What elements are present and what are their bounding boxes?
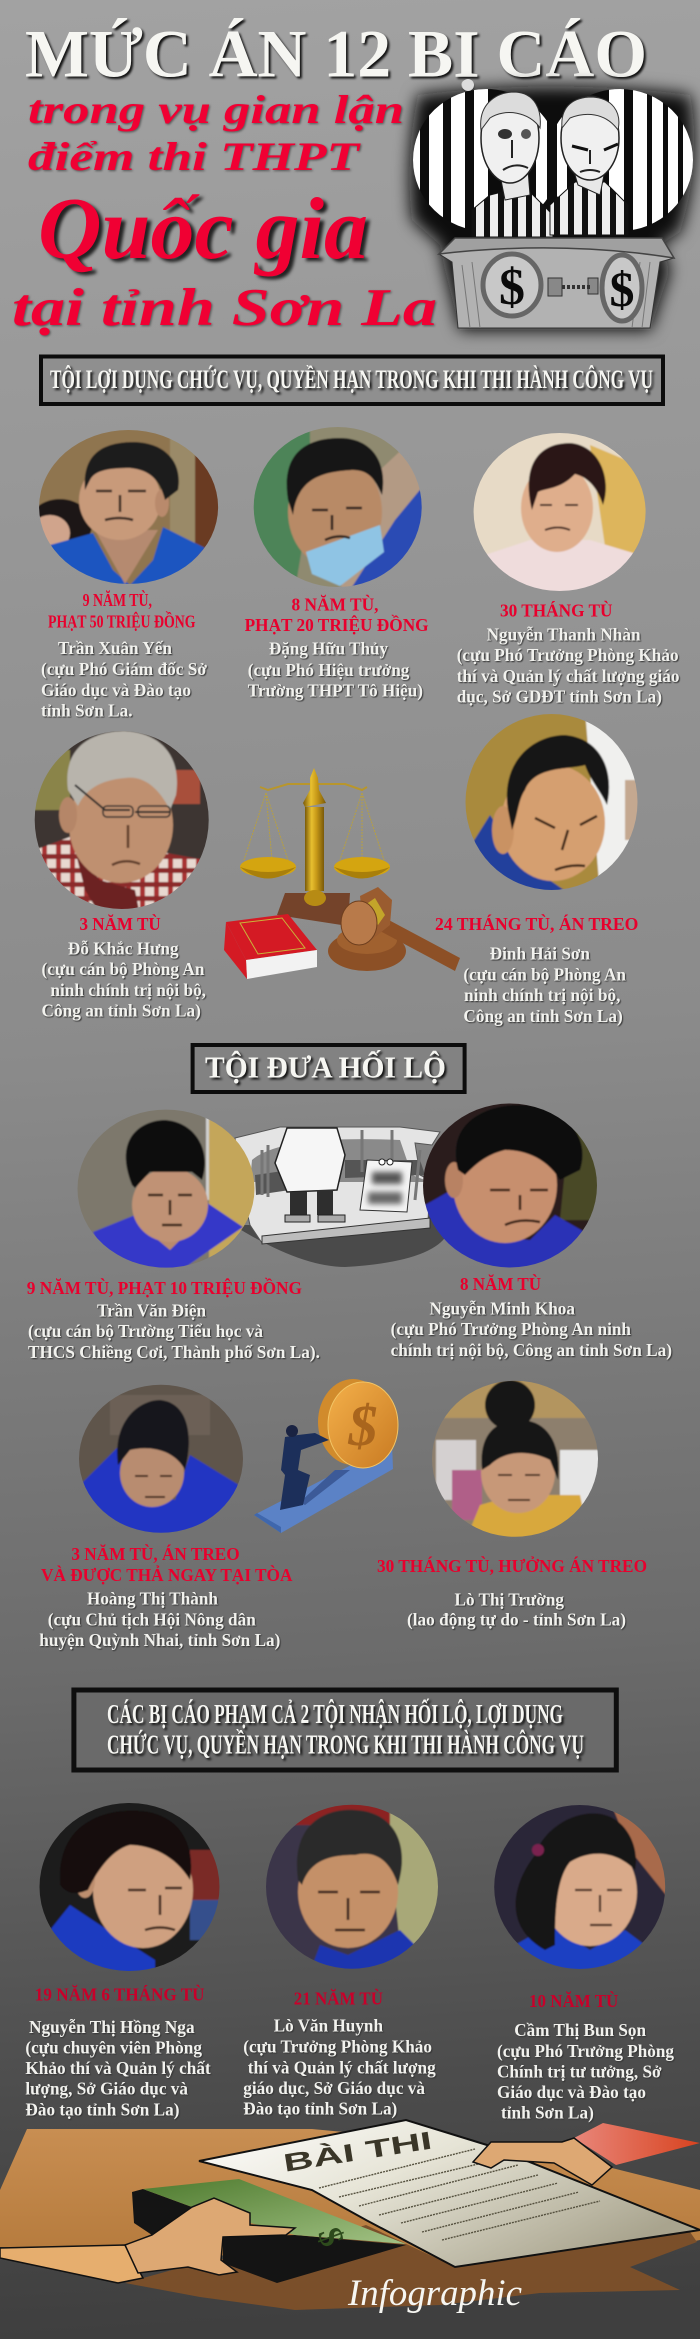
sentence — [41, 1543, 292, 1585]
photo — [490, 1801, 670, 1973]
sentence: PHẠT 50 TRIỆU ĐỒNG — [48, 610, 196, 631]
name and role — [28, 1300, 320, 1362]
sentence — [48, 589, 196, 631]
paper title: BÀI THI — [281, 2126, 434, 2178]
photo — [262, 1800, 442, 1972]
name and role: Chính trị tư tưởng, Sở — [497, 2062, 662, 2082]
name and role: Nguyễn Thị Hồng Nga — [29, 2017, 195, 2037]
sentence: VÀ ĐƯỢC THẢ NGAY TẠI TÒA — [41, 1564, 292, 1585]
photo — [79, 1384, 243, 1533]
sentence: 8 NĂM TÙ, — [292, 594, 378, 615]
name and role: (cựu Phó Trưởng Phòng — [497, 2041, 674, 2061]
photo — [78, 1110, 254, 1268]
exam paper — [199, 2120, 700, 2267]
panel: Cầm Thị Bun Sọn — [490, 1801, 674, 2123]
name and role: Đặng Hữu Thủy — [269, 639, 388, 659]
name and role: (cựu cán bộ Trường Tiểu học và — [28, 1321, 263, 1341]
name and role: Đỗ Khắc Hưng — [68, 939, 179, 959]
sentence: 3 NĂM TÙ — [80, 913, 161, 934]
section heading: bribery: TỘI ĐƯA HỐI LỘ — [205, 1049, 446, 1085]
name and role: Đào tạo tỉnh Sơn La) — [243, 2098, 397, 2118]
subtitle line 2: điểm thi THPT — [28, 134, 361, 179]
panel: Đỗ Khắc Hưng — [30, 726, 214, 1021]
name and role: tỉnh Sơn La. — [41, 701, 133, 721]
name and role: Giáo dục và Đào tạo — [497, 2082, 646, 2102]
sentence: 9 NĂM TÙ, PHẠT 10 TRIỆU ĐỒNG — [27, 1277, 302, 1298]
name and role: Lò Văn Huynh — [274, 2016, 383, 2036]
name and role: Nguyễn Thanh Nhàn — [487, 624, 641, 644]
photo — [39, 430, 218, 584]
sentence: PHẠT 20 TRIỆU ĐỒNG — [245, 614, 429, 635]
sentence: 8 NĂM TÙ — [460, 1273, 541, 1294]
sentence: 3 NĂM TÙ, ÁN TREO — [71, 1543, 240, 1564]
name and role: (cựu cán bộ Phòng An — [463, 964, 626, 984]
panel: Trần Văn Điện — [27, 1105, 320, 1362]
photo — [470, 430, 650, 595]
name and role: (cựu Chủ tịch Hội Nông dân — [48, 1609, 256, 1629]
footer label: Infographic — [347, 2273, 523, 2314]
sentence — [245, 594, 429, 635]
name and role — [391, 1298, 672, 1360]
sentence: 30 THÁNG TÙ, HƯỞNG ÁN TREO — [377, 1555, 647, 1576]
name and role: Trần Văn Điện — [97, 1300, 206, 1320]
icon: two prisoners behind bars with dollar handcuffs: $ — [499, 259, 525, 316]
panel: Lò Văn Huynh — [243, 1800, 442, 2118]
subtitle line 3: Quốc gia — [38, 181, 368, 278]
name and role: (cựu Phó Hiệu trưởng — [248, 660, 410, 680]
name and role: lượng, Sở Giáo dục và — [25, 2079, 188, 2099]
icon: gold scales, law book and gavel — [224, 768, 460, 979]
cash stack: $ — [310, 2223, 351, 2251]
panel: Nguyễn Thị Hồng Nga — [25, 1799, 224, 2119]
sentence: 10 NĂM TÙ — [529, 1990, 618, 2011]
subtitle line 1: trong vụ gian lận — [28, 87, 404, 132]
name and role: (lao động tự do - tỉnh Sơn La) — [407, 1610, 626, 1630]
name and role: Lò Thị Trường — [454, 1589, 564, 1609]
name and role: Đinh Hải Sơn — [490, 944, 590, 964]
name and role — [243, 2016, 436, 2118]
name and role — [497, 2020, 674, 2123]
name and role: dục, Sở GDĐT tỉnh Sơn La) — [457, 686, 662, 706]
left hand — [0, 2198, 295, 2283]
name and role — [42, 939, 206, 1021]
name and role — [248, 639, 423, 700]
illustration: exam paper and cash handover on a desk — [0, 2120, 700, 2310]
name and role: giáo dục, Sở Giáo dục và — [243, 2078, 425, 2098]
right hand and sleeve — [473, 2123, 700, 2185]
name and role: Công an tỉnh Sơn La) — [42, 1001, 201, 1021]
name and role: Đào tạo tỉnh Sơn La) — [25, 2099, 180, 2119]
section heading: bribery — [193, 1045, 465, 1092]
name and role: (cựu cán bộ Phòng An — [42, 959, 205, 979]
heading: main title: MỨC ÁN 12 BỊ CÁO — [25, 16, 647, 92]
section heading: both crimes — [74, 1690, 616, 1770]
name and role: tỉnh Sơn La) — [501, 2103, 594, 2123]
name and role — [457, 624, 680, 706]
name and role: Công an tỉnh Sơn La) — [463, 1006, 623, 1026]
name and role: Nguyễn Minh Khoa — [430, 1298, 575, 1318]
section heading: abuse of office — [41, 356, 663, 404]
icon: man pushing a coin up a ramp — [254, 1379, 398, 1533]
name and role: ninh chính trị nội bộ, — [464, 985, 620, 1005]
panel: Nguyễn Minh Khoa — [391, 1100, 672, 1360]
name and role: Khảo thí và Quản lý chất — [25, 2058, 211, 2078]
title — [12, 16, 647, 337]
name and role: Cầm Thị Bun Sọn — [514, 2020, 646, 2040]
name and role — [407, 1589, 626, 1630]
icon: two prisoners behind bars with dollar handcuffs — [405, 79, 700, 330]
panel: Đặng Hữu Thủy — [245, 424, 429, 700]
name and role — [463, 944, 626, 1026]
icon: cartoon bribery scene — [233, 1127, 447, 1267]
photo — [420, 1100, 600, 1272]
name and role: thí và Quản lý chất lượng — [248, 2057, 436, 2077]
desk shadow — [125, 2225, 697, 2310]
sentence: 9 NĂM TÙ, — [83, 589, 152, 610]
name and role: Giáo dục và Đào tạo — [41, 680, 191, 700]
panel: Hoàng Thị Thành — [39, 1380, 292, 1650]
sentence: 30 THÁNG TÙ — [500, 600, 612, 621]
name and role: Hoàng Thị Thành — [87, 1588, 218, 1608]
photo — [250, 424, 428, 590]
sentence: 24 THÁNG TÙ, ÁN TREO — [435, 913, 638, 934]
icon: two prisoners behind bars with dollar handcuffs: $ — [610, 261, 634, 317]
panel: Nguyễn Thanh Nhàn — [457, 430, 680, 706]
sentence: 21 NĂM TÙ — [294, 1987, 383, 2008]
photo — [34, 731, 209, 909]
name and role — [25, 2017, 211, 2119]
photo — [432, 1380, 598, 1537]
panel: Trần Xuân Yến — [39, 430, 218, 718]
name and role: huyện Quỳnh Nhai, tỉnh Sơn La) — [39, 1630, 281, 1650]
name and role: (cựu Phó Trưởng Phòng An ninh — [391, 1319, 631, 1339]
name and role: (cựu Phó Trưởng Phòng Khảo — [457, 645, 679, 665]
name and role: THCS Chiềng Cơi, Thành phố Sơn La). — [28, 1342, 320, 1362]
name and role: (cựu chuyên viên Phòng — [25, 2038, 202, 2058]
desk surface — [0, 2129, 700, 2260]
photo — [35, 1799, 224, 1975]
name and role: (cựu Trưởng Phòng Khảo — [243, 2037, 432, 2057]
subtitle line 4: tại tỉnh Sơn La — [12, 279, 437, 337]
name and role — [41, 638, 207, 721]
panel: Đinh Hải Sơn — [435, 710, 642, 1026]
icon: man pushing a coin up a ramp: $ — [348, 1393, 378, 1458]
name and role: Trường THPT Tô Hiệu) — [248, 680, 423, 700]
name and role: ninh chính trị nội bộ, — [50, 980, 206, 1000]
name and role: thí và Quản lý chất lượng giáo — [457, 666, 680, 686]
panel: Lò Thị Trường — [377, 1376, 647, 1630]
paper lines — [319, 2149, 600, 2240]
sentence: 19 NĂM 6 THÁNG TÙ — [35, 1984, 204, 2005]
name and role: Trần Xuân Yến — [58, 638, 172, 658]
name and role: chính trị nội bộ, Công an tỉnh Sơn La) — [391, 1340, 672, 1360]
name and role — [39, 1588, 281, 1650]
photo — [460, 710, 642, 894]
cash stack — [132, 2179, 406, 2283]
name and role: (cựu Phó Giám đốc Sở — [41, 659, 207, 679]
